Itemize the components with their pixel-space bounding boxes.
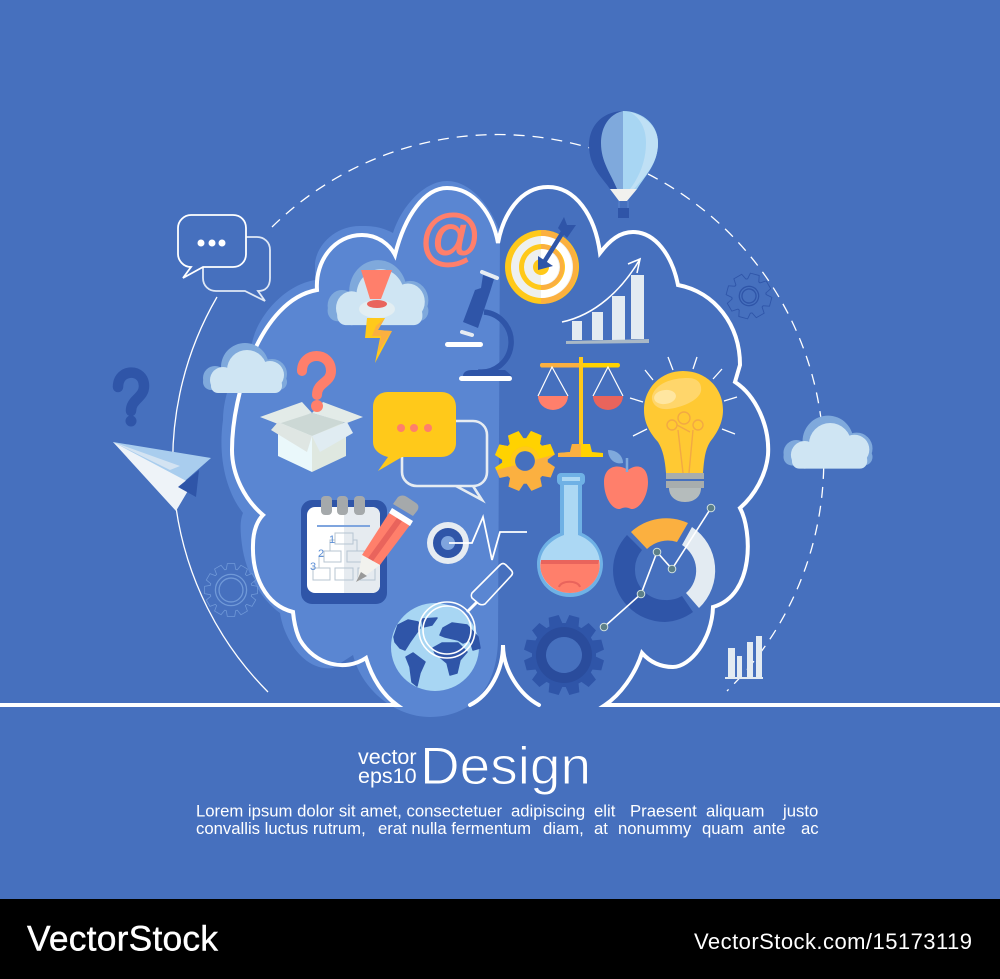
icon: pencil — [356, 496, 418, 582]
body text: Praesent — [630, 802, 697, 820]
body text: aliquam — [706, 802, 764, 820]
icon: speech bubbles outline — [178, 215, 270, 301]
body text — [196, 802, 819, 838]
icon: small bar chart — [725, 636, 763, 679]
body text: ac — [801, 819, 819, 838]
icon: apple — [604, 450, 648, 509]
icon: outline gear upper right — [722, 269, 776, 323]
icon: hot air balloon — [589, 111, 658, 218]
body text: nonummy — [618, 819, 692, 838]
icon: rising bar chart — [562, 259, 649, 344]
icon: microscope — [445, 272, 512, 381]
icon: dark question mark — [118, 373, 144, 426]
icon: yellow speech bubble with outline bubble — [373, 392, 487, 500]
icon: storm cloud with exclamation and lightning — [328, 260, 428, 363]
body text: quam — [702, 819, 744, 838]
icon: yellow gear — [495, 431, 555, 491]
body text: elit — [594, 802, 616, 820]
footer URL: VectorStock.com/15173119 — [694, 929, 972, 954]
body text: adipiscing — [511, 802, 585, 820]
heading: vector eps10: eps10 — [358, 764, 417, 788]
icon: right cloud — [783, 416, 873, 469]
footer band — [0, 899, 1000, 979]
footer brand: VectorStock: VectorStock — [27, 918, 218, 958]
heading: vector eps10: vector — [358, 745, 417, 769]
icon: left cloud — [203, 343, 287, 393]
icon: notepad with flow chart: 1 — [329, 534, 335, 546]
icon: target with arrow — [505, 217, 579, 304]
icon: donut chart with line — [600, 504, 715, 631]
icon: pulse ring — [427, 517, 527, 564]
icon: outline gear lower left — [205, 564, 257, 616]
icon: open box with question mark — [260, 356, 363, 472]
body text: ante — [753, 819, 785, 838]
body text: diam, — [543, 819, 584, 838]
icon: flask — [537, 473, 603, 597]
body text: erat nulla fermentum — [378, 819, 531, 838]
brain left hemisphere fill — [221, 181, 500, 717]
body text: justo — [782, 802, 818, 820]
body text: Lorem ipsum dolor sit amet, consectetuer — [196, 802, 503, 820]
icon: at sign: @ — [419, 203, 482, 272]
icon: magnifier — [419, 564, 512, 658]
icon: scales — [538, 357, 623, 457]
icon: paper plane — [113, 442, 211, 511]
dashed orbit arc: top — [272, 135, 590, 227]
body text: at — [594, 819, 608, 838]
icon: light bulb — [630, 357, 737, 502]
icon: notepad with flow chart: 3 — [310, 561, 316, 573]
brain outline — [0, 187, 1000, 705]
body text: convallis luctus rutrum, — [196, 819, 366, 838]
solid orbit arc: left — [173, 297, 268, 692]
icon: notepad with flow chart: 2 — [318, 548, 324, 560]
icon: notepad with flow chart — [301, 496, 387, 604]
heading: Design: Design — [420, 737, 591, 796]
icon: dark gear — [515, 606, 613, 704]
dashed orbit arc: right — [648, 174, 824, 691]
heading: vector eps10 — [358, 745, 417, 788]
icon: globe — [391, 603, 480, 691]
